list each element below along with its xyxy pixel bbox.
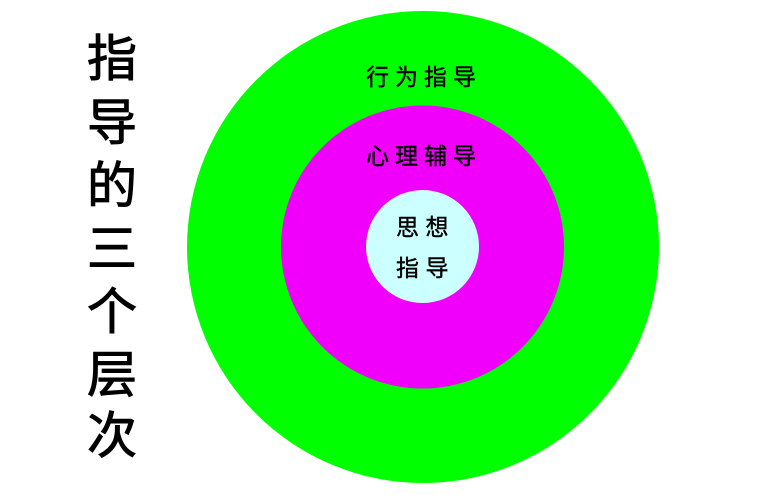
title: vertical heading: 层 xyxy=(87,335,137,407)
title: vertical heading: 导 xyxy=(87,83,137,155)
label: ideological guidance: 思想 xyxy=(396,208,455,242)
title: vertical heading: 个 xyxy=(87,272,137,344)
title: vertical heading: 指 xyxy=(87,19,137,91)
title: vertical heading: 的 xyxy=(87,146,137,218)
label: psychological counselling: 心理辅导 xyxy=(366,137,482,171)
inner circle: ideological guidance xyxy=(366,190,479,303)
label: ideological guidance xyxy=(396,208,455,283)
middle circle: psychological counselling xyxy=(281,106,564,388)
title: vertical heading xyxy=(87,19,137,468)
title: vertical heading: 三 xyxy=(87,209,137,281)
outer circle: behaviour guidance xyxy=(187,11,659,483)
title: vertical heading: 次 xyxy=(87,396,137,468)
label: behaviour guidance: 行为指导 xyxy=(366,58,482,92)
label: ideological guidance: 指导 xyxy=(396,249,455,283)
